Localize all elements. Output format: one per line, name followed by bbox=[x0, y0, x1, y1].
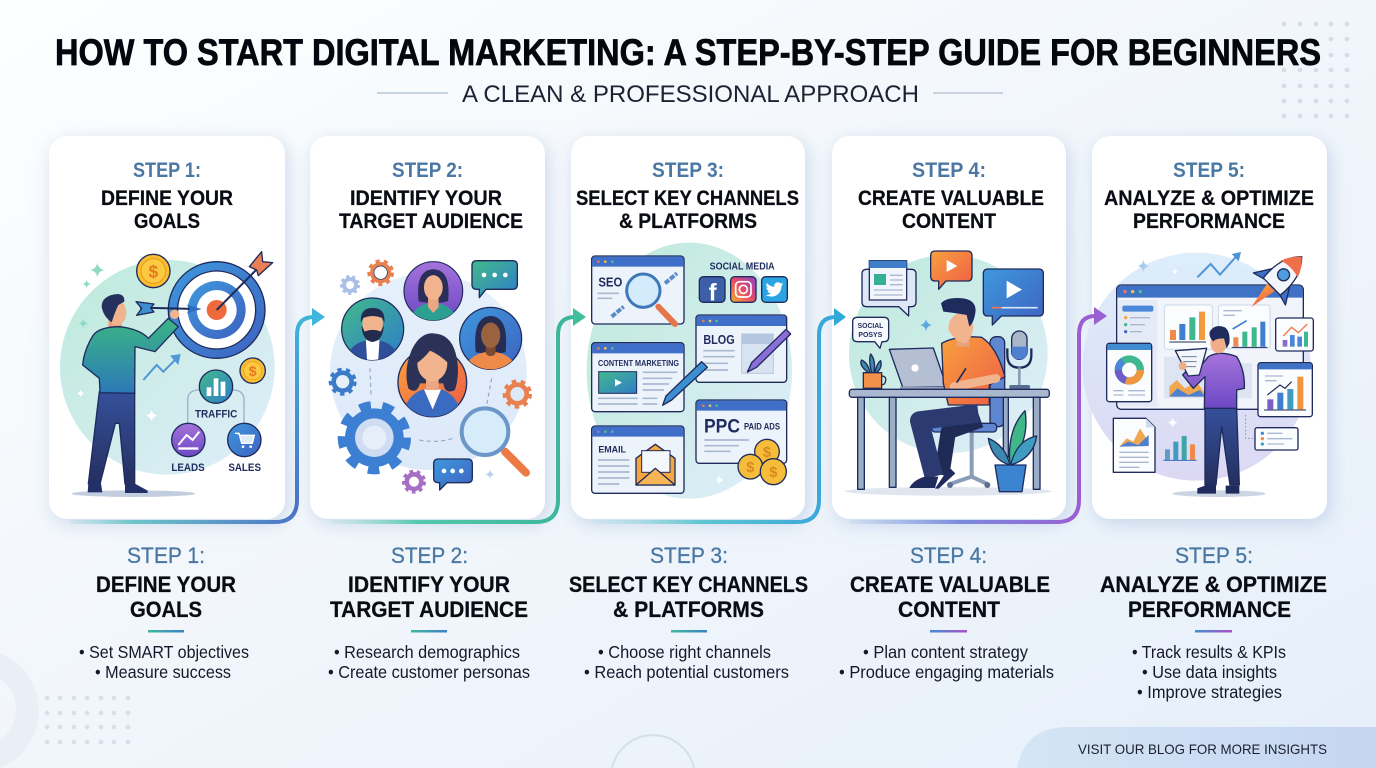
icon: desk plant and mug bbox=[861, 354, 886, 388]
card heading: & PLATFORMS bbox=[619, 210, 757, 233]
figure: man bbox=[72, 294, 202, 497]
footer banner bbox=[1017, 727, 1376, 768]
icon: laptop bbox=[889, 348, 965, 389]
window: blog bbox=[696, 315, 791, 382]
decoration: bottom-left ring bbox=[0, 653, 39, 768]
icon: blue chat bubble bbox=[434, 459, 472, 490]
icon: small coin bbox=[240, 358, 265, 383]
step title: ANALYZE & OPTIMIZE bbox=[1100, 572, 1327, 597]
chart card bbox=[1164, 305, 1212, 349]
card heading: ANALYZE & OPTIMIZE bbox=[1104, 187, 1314, 210]
icon: gears bbox=[331, 262, 529, 492]
step title: & PLATFORMS bbox=[613, 597, 764, 622]
bullets: • Choose right channels bbox=[598, 642, 771, 662]
decoration: top-right dots bbox=[1282, 22, 1349, 118]
step title bbox=[330, 572, 528, 622]
illustration: marketing channels bbox=[587, 243, 792, 499]
bullets: • Improve strategies bbox=[1137, 682, 1282, 702]
divider bbox=[1195, 630, 1232, 632]
decoration: bottom circle outline bbox=[612, 735, 694, 768]
bullets: • Use data insights bbox=[1142, 662, 1277, 682]
connector arrow: step 2 to step 3 bbox=[330, 308, 586, 522]
icon: envelope bbox=[636, 444, 675, 485]
flow connector bbox=[188, 390, 244, 423]
card heading bbox=[576, 159, 799, 233]
illustration: man aiming arrow at target bbox=[60, 252, 275, 497]
step title: CONTENT bbox=[898, 597, 1000, 622]
card heading bbox=[101, 159, 233, 233]
divider bbox=[411, 630, 447, 632]
card heading: PERFORMANCE bbox=[1133, 210, 1285, 233]
panel: step 4 card bbox=[832, 136, 1066, 519]
icon: leads: LEADS bbox=[171, 462, 205, 474]
icon: small coin: $ bbox=[249, 363, 257, 379]
card heading: STEP 1: bbox=[133, 159, 201, 182]
illustration: creator at desk bbox=[845, 251, 1052, 496]
card heading bbox=[1104, 159, 1314, 233]
bullets: • Track results & KPIs bbox=[1132, 642, 1286, 662]
card background bbox=[310, 136, 545, 519]
right chart card bbox=[1258, 363, 1312, 417]
bullets: • Plan content strategy bbox=[863, 642, 1028, 662]
bullets: • Research demographics bbox=[334, 642, 520, 662]
section: step 4 description bbox=[839, 543, 1054, 682]
icon: rocket bbox=[1235, 241, 1318, 323]
card heading: IDENTIFY YOUR bbox=[350, 187, 502, 210]
decoration: bottom-left dots bbox=[45, 696, 130, 744]
icon: coin: $ bbox=[149, 261, 159, 281]
bullets bbox=[584, 642, 789, 682]
icon: coins: $ bbox=[769, 465, 777, 481]
divider bbox=[930, 630, 967, 632]
icon: target bbox=[168, 262, 265, 358]
step title bbox=[1100, 572, 1327, 622]
window: SEO bbox=[592, 256, 684, 324]
bullets bbox=[839, 642, 1054, 682]
icon: magnifier bbox=[462, 408, 526, 473]
illustration: analytics dashboard bbox=[1083, 241, 1318, 497]
icon: coins bbox=[738, 439, 786, 485]
chart card bbox=[1218, 305, 1270, 348]
bullets: • Reach potential customers bbox=[584, 662, 789, 682]
panel: step 1 card bbox=[49, 136, 285, 519]
icon: office chair bbox=[932, 337, 1005, 488]
section: step 1 description bbox=[79, 543, 249, 682]
avatar: woman purple bbox=[404, 262, 463, 320]
icon: coins: $ bbox=[763, 445, 771, 461]
card heading bbox=[858, 159, 1044, 233]
step title: PERFORMANCE bbox=[1128, 597, 1291, 622]
card heading: STEP 5: bbox=[1173, 159, 1245, 182]
icon: potted plant bbox=[988, 411, 1037, 492]
divider bbox=[671, 630, 707, 632]
icon: coins: $ bbox=[746, 460, 754, 476]
bullets bbox=[1132, 642, 1286, 702]
icon: trend arrow bbox=[1197, 252, 1241, 277]
icon: sales: SALES bbox=[228, 462, 261, 474]
window: PPC: PPC bbox=[704, 417, 740, 438]
bullets: • Produce engaging materials bbox=[839, 662, 1054, 682]
icon: twitter bbox=[762, 277, 787, 302]
window: content marketing: CONTENT MARKETING bbox=[598, 358, 679, 368]
mini chart bbox=[1276, 318, 1313, 351]
step label: STEP 3: bbox=[650, 543, 728, 568]
icon: traffic bbox=[195, 370, 237, 421]
dashboard window bbox=[1117, 285, 1303, 409]
icon: coin bbox=[137, 254, 170, 288]
connector arrow: step 1 to step 2 bbox=[70, 308, 325, 522]
icon: sales bbox=[228, 423, 261, 474]
bullets: • Set SMART objectives bbox=[79, 642, 249, 662]
window: SEO: SEO bbox=[598, 276, 622, 290]
card heading: TARGET AUDIENCE bbox=[339, 210, 523, 233]
step title: IDENTIFY YOUR bbox=[348, 572, 510, 597]
desk shadow bbox=[845, 487, 1052, 496]
step title bbox=[850, 572, 1050, 622]
card heading: STEP 2: bbox=[392, 159, 463, 182]
step title: TARGET AUDIENCE bbox=[330, 597, 528, 622]
label: social media: SOCIAL MEDIA bbox=[710, 261, 775, 272]
donut card bbox=[1107, 343, 1152, 402]
window: PPC: PAID ADS bbox=[744, 422, 780, 432]
icon: instagram bbox=[731, 277, 756, 302]
bullets: • Create customer personas bbox=[328, 662, 530, 682]
icon: blue video bubble bbox=[983, 269, 1043, 325]
bullets bbox=[79, 642, 249, 682]
icon: microphone bbox=[1007, 331, 1031, 389]
card heading: CREATE VALUABLE bbox=[858, 187, 1044, 210]
document bbox=[1113, 418, 1155, 472]
section: step 2 description bbox=[328, 543, 530, 682]
card heading bbox=[339, 159, 523, 233]
card heading: STEP 4: bbox=[912, 159, 986, 182]
window: PPC bbox=[696, 400, 787, 463]
icon: document bubble bbox=[862, 261, 916, 316]
label bubble: social posts: SOCIAL bbox=[858, 323, 884, 330]
step label: STEP 2: bbox=[391, 543, 468, 568]
divider bbox=[148, 630, 184, 632]
step label: STEP 5: bbox=[1175, 543, 1253, 568]
card heading: STEP 3: bbox=[652, 159, 724, 182]
section: step 5 description bbox=[1100, 543, 1327, 702]
label: social media bbox=[699, 261, 787, 306]
icon: arrow in target bbox=[217, 252, 273, 310]
bullets: • Measure success bbox=[95, 662, 231, 682]
icon: orange video bubble bbox=[931, 251, 972, 289]
icon: trend arrow bbox=[143, 354, 181, 380]
label bubble: social posts: POSYS bbox=[858, 332, 883, 339]
step label: STEP 1: bbox=[127, 543, 205, 568]
card heading: DEFINE YOUR bbox=[101, 187, 233, 210]
avatar: centre woman bbox=[398, 333, 467, 420]
card background bbox=[832, 136, 1066, 519]
icon: desk bbox=[849, 389, 1049, 489]
step title: DEFINE YOUR bbox=[96, 572, 236, 597]
avatar: bearded man bbox=[342, 298, 404, 360]
step title: CREATE VALUABLE bbox=[850, 572, 1050, 597]
icon: traffic: TRAFFIC bbox=[195, 409, 237, 421]
icon: green chat bubble bbox=[472, 261, 517, 298]
card heading: SELECT KEY CHANNELS bbox=[576, 187, 799, 210]
connector arrow: step 3 to step 4 bbox=[590, 308, 846, 522]
icon: leads bbox=[171, 423, 205, 474]
section: step 3 description bbox=[569, 543, 808, 682]
illustration: audience personas, gears and magnifier bbox=[330, 261, 529, 492]
figure: person at laptop bbox=[909, 298, 1005, 489]
bottom bar chart bbox=[1163, 436, 1197, 460]
figure: analyst with tablet bbox=[1172, 326, 1266, 497]
window: content marketing bbox=[592, 343, 707, 412]
dashed links bbox=[370, 368, 492, 441]
subtitle: A CLEAN & PROFESSIONAL APPROACH bbox=[462, 81, 919, 108]
area chart bbox=[1164, 357, 1207, 398]
card background bbox=[571, 136, 805, 519]
avatar: woman blue bbox=[460, 307, 522, 369]
step title bbox=[569, 572, 808, 622]
window: email bbox=[592, 426, 684, 493]
icon: facebook: f bbox=[709, 279, 718, 306]
step label: STEP 4: bbox=[910, 543, 987, 568]
connector arrow: step 4 to step 5 bbox=[850, 307, 1107, 522]
panel: step 5 card bbox=[1083, 136, 1327, 519]
window: blog: BLOG bbox=[703, 333, 735, 347]
bullets bbox=[328, 642, 530, 682]
step title: SELECT KEY CHANNELS bbox=[569, 572, 808, 597]
panel: step 3 card bbox=[571, 136, 805, 519]
card background bbox=[49, 136, 285, 519]
legend card bbox=[1246, 415, 1298, 450]
card heading: CONTENT bbox=[902, 210, 996, 233]
step title bbox=[96, 572, 236, 622]
label bubble: social posts bbox=[853, 317, 889, 348]
card background bbox=[1092, 136, 1327, 519]
icon: held arrow bbox=[136, 302, 202, 315]
footer banner: VISIT OUR BLOG FOR MORE INSIGHTS bbox=[1078, 741, 1327, 757]
window: email: EMAIL bbox=[598, 445, 626, 455]
step title: GOALS bbox=[130, 597, 202, 622]
card heading: GOALS bbox=[134, 210, 200, 233]
panel: step 2 card bbox=[310, 136, 545, 519]
